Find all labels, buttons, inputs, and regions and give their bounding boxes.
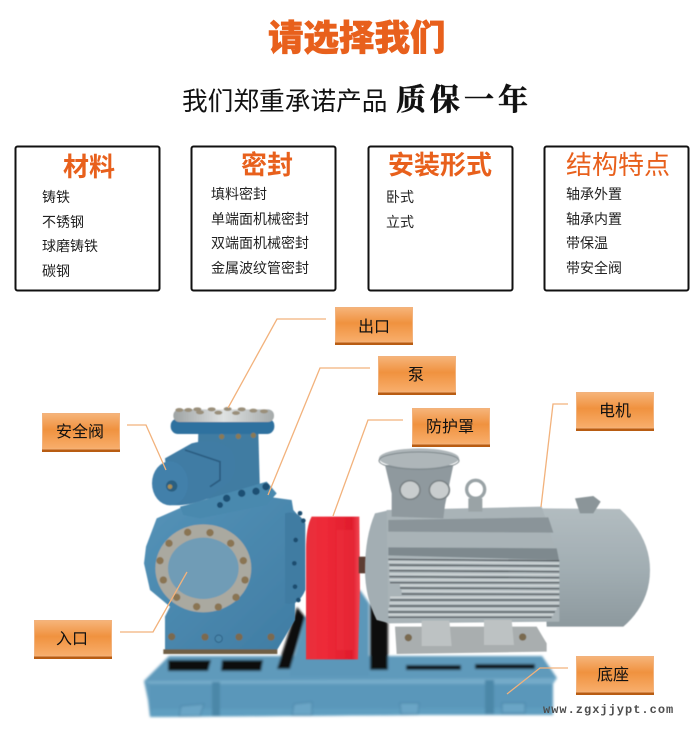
list: structure: 轴承内置 xyxy=(566,211,622,227)
list: seals: 双端面机械密封 xyxy=(211,235,309,251)
heading: materials: 材料 xyxy=(63,152,115,182)
label: safety valve xyxy=(42,413,120,452)
list: installation: 卧式 xyxy=(386,189,414,205)
label: safety valve: 安全阀 xyxy=(56,423,104,441)
panel: structure xyxy=(544,146,688,290)
list: structure xyxy=(566,186,622,276)
motor feet xyxy=(395,620,547,654)
pump assembly xyxy=(144,407,367,659)
list: seals: 单端面机械密封 xyxy=(211,211,309,227)
title: 请选择我们 xyxy=(268,18,446,58)
label: guard xyxy=(412,408,490,447)
leader line: pump xyxy=(268,368,370,495)
heading: seals: 密封 xyxy=(241,150,293,180)
list: seals xyxy=(211,186,309,276)
motor assembly xyxy=(365,448,650,654)
panel: installation xyxy=(368,146,512,290)
subtitle: quality promise xyxy=(182,84,532,117)
label: pump xyxy=(378,356,456,395)
motor cooling fins xyxy=(388,559,559,617)
list: materials: 不锈钢 xyxy=(42,214,84,230)
list: installation: 立式 xyxy=(386,214,414,230)
subtitle: quality promise: 我们郑重承诺产品 xyxy=(182,87,388,116)
watermark: www.zgxjjypt.com xyxy=(543,703,674,717)
heading: installation: 安装形式 xyxy=(388,150,492,180)
panel: seals xyxy=(192,146,336,290)
list: materials: 球磨铸铁 xyxy=(42,238,98,254)
list: structure: 带安全阀 xyxy=(566,260,622,276)
motor end shield xyxy=(365,510,390,623)
label: inlet: 入口 xyxy=(56,631,88,648)
list: structure: 带保温 xyxy=(566,235,608,251)
top-plate bolts xyxy=(217,483,270,508)
leader line: inlet xyxy=(120,572,187,632)
label: motor: 电机 xyxy=(599,402,631,420)
leader line: motor xyxy=(541,404,568,507)
list: seals: 填料密封 xyxy=(211,186,267,202)
list: seals: 金属波纹管密封 xyxy=(211,260,309,276)
leader line: safety valve xyxy=(127,425,166,470)
base mounting pads xyxy=(179,702,525,716)
red coupling guard xyxy=(306,517,360,659)
top outlet flange xyxy=(171,407,274,439)
base slots xyxy=(168,603,535,671)
leader line: guard xyxy=(333,420,403,516)
eye bolt xyxy=(467,480,485,512)
heading: structure: 结构特点 xyxy=(566,150,670,180)
pump neck xyxy=(197,432,260,500)
panel: materials xyxy=(16,146,160,290)
motor fan cover xyxy=(542,508,650,627)
pump body xyxy=(144,497,305,651)
list: installation xyxy=(386,189,414,230)
list: structure: 轴承外置 xyxy=(566,186,622,202)
side cover bolts xyxy=(285,513,305,604)
label: motor xyxy=(576,392,654,431)
pump cover flange xyxy=(155,524,251,612)
leader line: base xyxy=(507,668,568,694)
fan-cover terminal xyxy=(575,496,601,513)
motor body xyxy=(387,507,559,623)
brush text: one-year warranty: 质保一年 xyxy=(396,84,532,117)
junction box xyxy=(379,448,459,518)
list: materials: 铸铁 xyxy=(42,189,70,205)
safety valve xyxy=(152,441,235,505)
label: base xyxy=(576,656,654,695)
leader line: outlet xyxy=(228,319,326,408)
label: outlet: 出口 xyxy=(358,318,390,336)
label: outlet xyxy=(335,307,413,345)
list: materials: 碳钢 xyxy=(42,263,70,279)
label: guard: 防护罩 xyxy=(426,418,474,436)
label: pump: 泵 xyxy=(408,366,424,384)
label: inlet xyxy=(34,620,112,659)
list: materials xyxy=(42,189,98,279)
raised platform under guard xyxy=(290,590,369,676)
flange bolts xyxy=(156,529,249,611)
foot bolts xyxy=(168,633,275,641)
label: base: 底座 xyxy=(597,666,629,684)
base frame xyxy=(144,590,557,717)
shaft xyxy=(359,557,367,573)
